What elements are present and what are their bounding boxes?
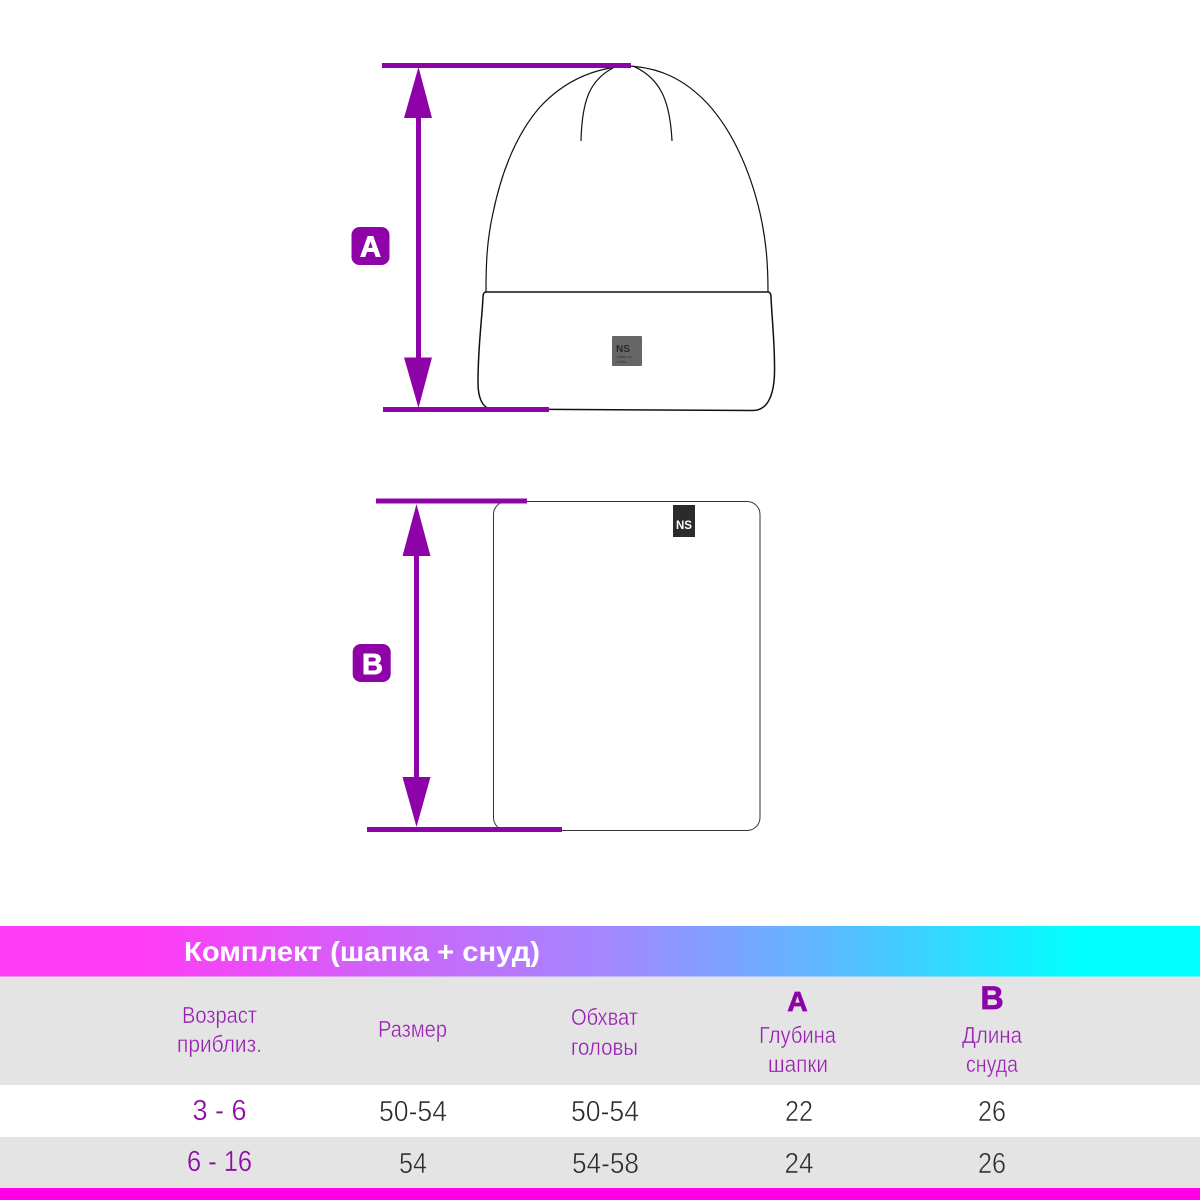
table column headers: Размер (378, 1016, 447, 1042)
table column headers: A (787, 986, 808, 1017)
table column headers: снуда (966, 1051, 1018, 1077)
table title bar: Комплект (шапка + снуд) (184, 936, 540, 967)
snood diagram (494, 502, 760, 830)
table row 6-16: 54-58 (572, 1148, 639, 1180)
table row 6-16: 54 (399, 1148, 427, 1180)
hat label patch: NS (616, 344, 630, 355)
snood label patch (673, 505, 695, 537)
table row 6-16: 24 (784, 1148, 814, 1180)
hat cuff (478, 292, 775, 410)
dimension A arrow (382, 63, 631, 412)
dimension B arrow (367, 498, 562, 832)
table column headers: Глубина (759, 1022, 836, 1048)
badge B (353, 644, 391, 682)
table bottom bar (0, 1188, 1200, 1200)
table title bar (0, 926, 1200, 976)
table row 6-16 (0, 1137, 1200, 1188)
badge A: A (360, 232, 381, 264)
table row 3-6: 50-54 (379, 1096, 447, 1128)
table column headers: головы (571, 1034, 638, 1060)
badge B: B (362, 649, 383, 681)
table row 6-16: 26 (978, 1148, 1006, 1180)
snood outline (494, 502, 760, 830)
size table (0, 926, 1200, 1200)
badge A (352, 227, 390, 265)
table column headers (0, 976, 1200, 1085)
table column headers: Обхват (571, 1004, 638, 1030)
table column headers: B (980, 980, 1004, 1016)
hat label patch (612, 336, 642, 366)
table row 6-16: 6 - 16 (187, 1146, 252, 1178)
hat crown seams (581, 66, 672, 141)
table column headers: Возраст (182, 1002, 257, 1028)
snood label patch: NS (676, 520, 692, 532)
hat label patch: smile... (617, 359, 629, 364)
table row 3-6: 3 - 6 (192, 1095, 246, 1127)
table row 3-6: 50-54 (571, 1096, 639, 1128)
hat diagram (478, 66, 775, 410)
table column headers: приблиз. (177, 1031, 262, 1057)
table row 3-6: 26 (978, 1096, 1006, 1128)
table row 3-6: 22 (785, 1096, 813, 1128)
table column headers: Длина (962, 1022, 1022, 1048)
hat label patch: wake up, (617, 354, 633, 359)
table row 3-6 (0, 1085, 1200, 1137)
hat crown outline (486, 66, 768, 292)
table column headers: шапки (768, 1051, 828, 1077)
